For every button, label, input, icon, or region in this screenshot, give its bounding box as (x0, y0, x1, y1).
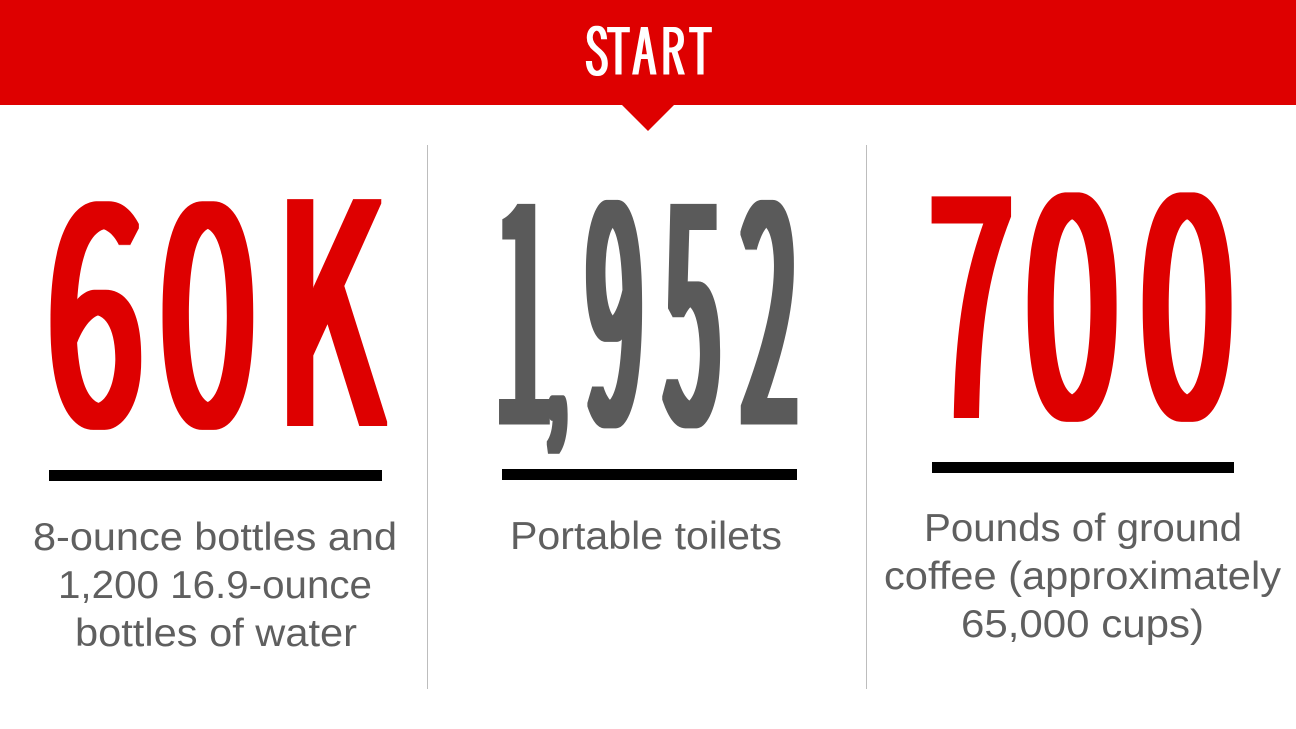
big number: 700: 7 (930, 71, 1013, 502)
big number: 1,952 (496, 78, 797, 509)
big number: 700 (930, 71, 1234, 502)
panel: ground coffee (884, 71, 1292, 646)
panel: portable toilets (496, 78, 797, 558)
big number: 1,952: , (549, 214, 566, 470)
big number: 700: 00 (1025, 71, 1234, 502)
caption: ground coffee: coffee (approximately (884, 555, 1282, 598)
caption: ground coffee: 65,000 cups) (961, 603, 1204, 646)
big number: 60K: K (276, 72, 382, 512)
caption: water bottles: 1,200 16.9-ounce (58, 564, 372, 607)
header banner: start: START (585, 19, 713, 87)
big number: 1,952: 1 (496, 78, 551, 509)
panel: water bottles (33, 72, 408, 655)
caption: ground coffee: Pounds of ground (924, 507, 1242, 550)
big number: 60K (47, 72, 382, 512)
header banner: start (0, 0, 1296, 131)
big number: 60K: 60 (47, 72, 256, 512)
caption: water bottles: 8-ounce bottles and (33, 516, 397, 559)
caption: portable toilets: Portable toilets (510, 515, 782, 558)
caption: water bottles: bottles of water (75, 612, 357, 655)
big number: 1,952: 952 (587, 78, 797, 509)
